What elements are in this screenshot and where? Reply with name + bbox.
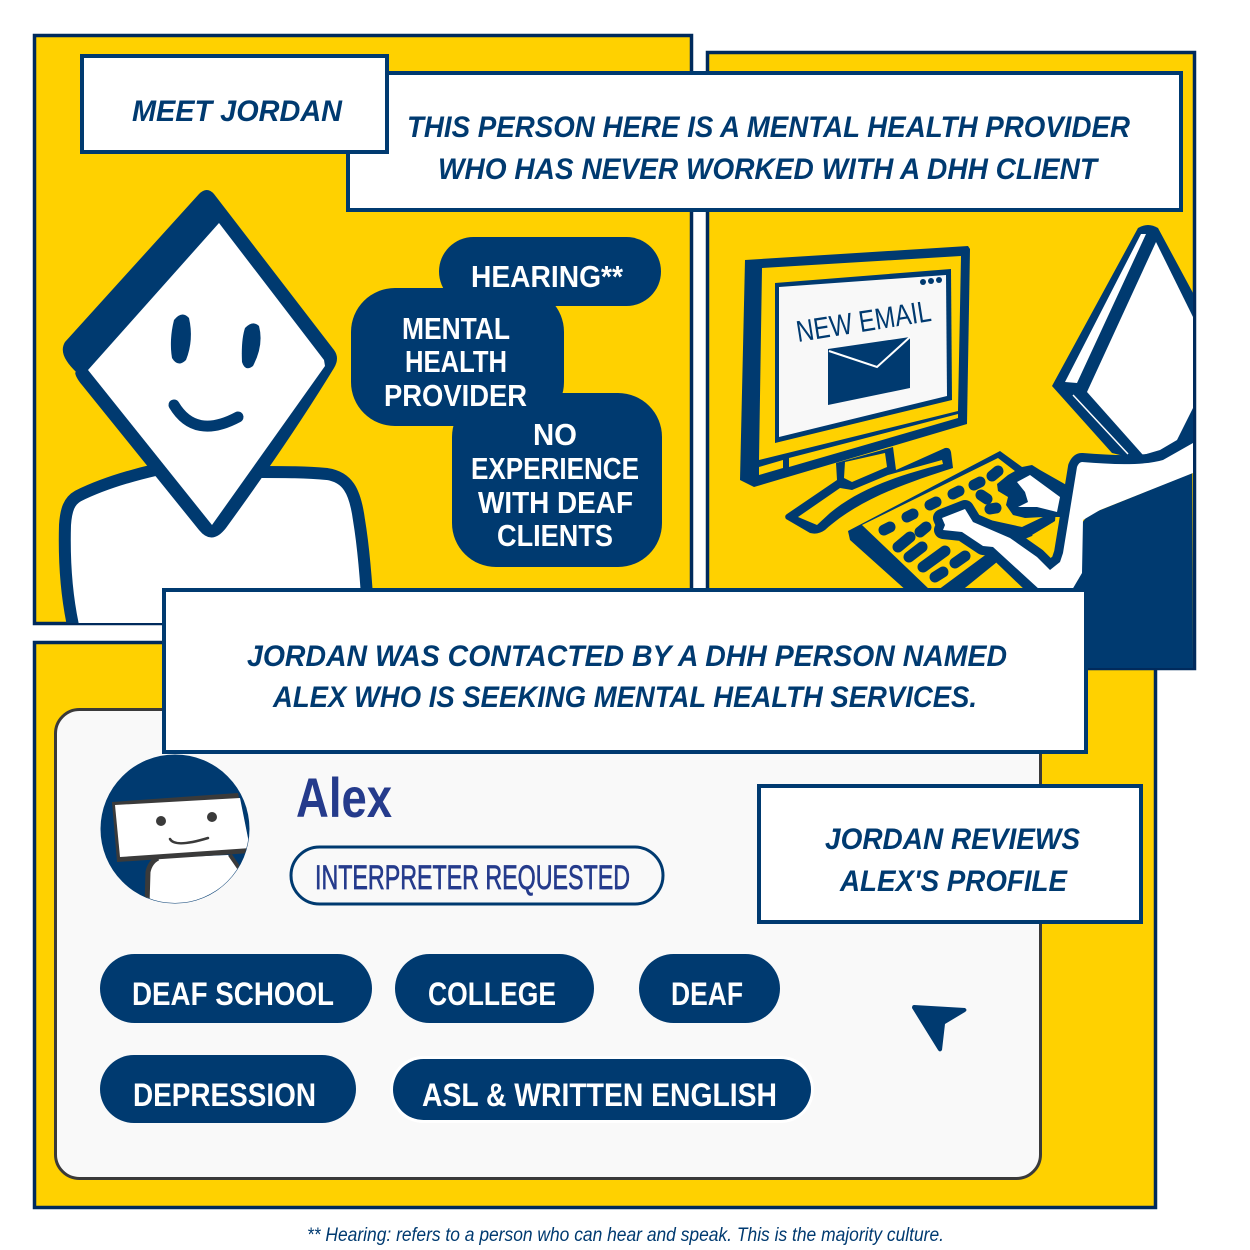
caption: jordan reviews: ALEX'S PROFILE xyxy=(839,865,1068,898)
caption: meet jordan: MEET JORDAN xyxy=(132,95,343,128)
bubble text: no experience with deaf clients xyxy=(471,417,639,553)
caption: meet jordan xyxy=(82,56,387,152)
Jordan smile xyxy=(174,405,238,426)
bubble text: no experience with deaf clients: EXPERIENCE xyxy=(471,451,639,486)
icon: cursor arrow xyxy=(912,1005,966,1052)
bubble text: no experience with deaf clients: NO xyxy=(533,417,577,452)
tag: college: COLLEGE xyxy=(428,976,556,1012)
caption: this person here: THIS PERSON HERE IS A MENTAL HEALTH PROVIDER xyxy=(407,111,1130,144)
caption: jordan reviews xyxy=(759,786,1141,922)
bubble text: mental health provider xyxy=(384,311,527,413)
bubble text: no experience with deaf clients: WITH DEAF xyxy=(478,485,633,520)
caption: jordan reviews: JORDAN REVIEWS xyxy=(825,823,1080,856)
panel: Alex profile card xyxy=(56,710,1040,1178)
tag: deaf xyxy=(639,954,780,1023)
panel: bottom yellow panel xyxy=(34,642,1156,1208)
figure: Jordan xyxy=(63,190,369,630)
badge: interpreter requested xyxy=(291,847,663,904)
screen text: new email: NEW EMAIL xyxy=(794,295,933,349)
figure: typing person xyxy=(942,225,1193,592)
Jordan eyes xyxy=(171,314,261,368)
name: Alex: Alex xyxy=(296,766,392,829)
head xyxy=(1052,225,1193,465)
bubble text: mental health provider: HEALTH xyxy=(405,344,507,379)
caption: this person here xyxy=(348,73,1181,210)
caption: this person here: WHO HAS NEVER WORKED WITH A DHH CLIENT xyxy=(438,153,1099,186)
monitor stand xyxy=(785,447,953,534)
speech bubbles: Jordan's traits xyxy=(351,237,662,567)
tag: deaf: DEAF xyxy=(671,976,743,1012)
arm and torso xyxy=(942,443,1193,590)
badge: interpreter requested: INTERPRETER REQUESTED xyxy=(315,859,630,897)
caption: jordan was contacted: JORDAN WAS CONTACTED BY A DHH PERSON NAMED xyxy=(247,640,1007,673)
bubble text: hearing: HEARING** xyxy=(471,259,624,294)
panel: Jordan portrait xyxy=(34,36,692,630)
tag: asl and written english: ASL & WRITTEN ENGLISH xyxy=(422,1077,777,1113)
panel: Jordan at computer xyxy=(708,52,1194,668)
tag: deaf school: DEAF SCHOOL xyxy=(132,976,334,1012)
bubble text: no experience with deaf clients: CLIENTS xyxy=(497,518,613,553)
icon: envelope xyxy=(828,337,910,405)
footnote: ** Hearing: refers to a person who can hear and speak. This is the majority culture. xyxy=(307,1225,944,1246)
icon: keyboard xyxy=(848,451,1058,592)
icon: monitor xyxy=(740,246,970,534)
arm and torso outline xyxy=(933,453,1151,588)
caption: jordan was contacted: ALEX WHO IS SEEKING MENTAL HEALTH SERVICES. xyxy=(272,681,977,714)
shirt block xyxy=(1071,473,1193,668)
avatar: Alex xyxy=(100,754,250,910)
tag: depression: DEPRESSION xyxy=(133,1077,316,1113)
tag: asl and written english xyxy=(390,1056,814,1123)
tag: deaf school xyxy=(100,954,372,1023)
tag: depression xyxy=(100,1055,356,1123)
bubble text: mental health provider: PROVIDER xyxy=(384,378,527,413)
caption: jordan was contacted xyxy=(164,590,1086,752)
right hand xyxy=(997,465,1070,518)
tag: college xyxy=(395,954,594,1023)
bubble text: mental health provider: MENTAL xyxy=(402,311,510,346)
